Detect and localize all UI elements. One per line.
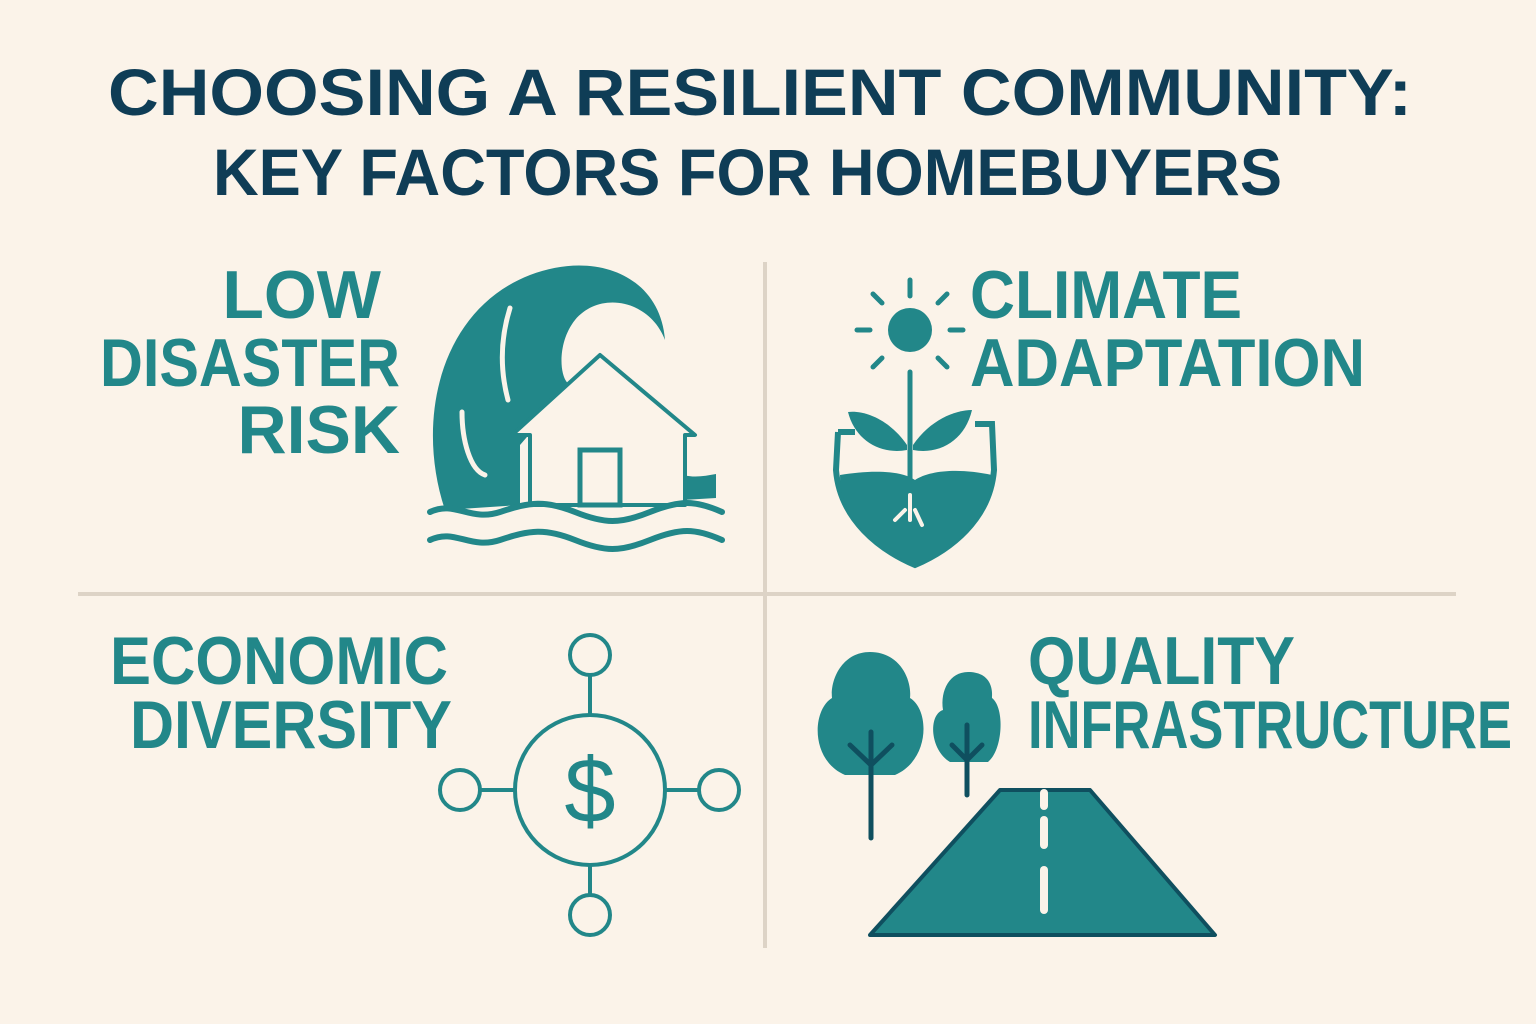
icon: wave and house [430, 265, 722, 549]
heading: economic diversity [110, 623, 452, 763]
panel: economic diversity [110, 623, 739, 935]
panel: low disaster risk [100, 257, 722, 549]
icon: sun and plant shield [836, 280, 994, 565]
heading: climate adaptation: ADAPTATION [970, 325, 1365, 401]
heading: low disaster risk [100, 257, 400, 468]
title: CHOOSING A RESILIENT COMMUNITY: [108, 55, 1412, 129]
icon: trees and road [818, 652, 1215, 935]
heading: climate adaptation [970, 257, 1365, 401]
heading: economic diversity: ECONOMIC [110, 623, 448, 699]
title [108, 55, 1412, 209]
heading: quality infrastructure: QUALITY [1028, 623, 1295, 699]
heading: economic diversity: DIVERSITY [130, 687, 452, 763]
panel: quality infrastructure [818, 623, 1512, 935]
heading: low disaster risk: RISK [238, 392, 400, 468]
heading: climate adaptation: CLIMATE [970, 257, 1242, 333]
panel: climate adaptation [836, 257, 1365, 565]
title: KEY FACTORS FOR HOMEBUYERS [213, 135, 1282, 209]
heading: quality infrastructure [1028, 623, 1512, 763]
icon: dollar network: $ [564, 740, 616, 842]
icon: dollar network [440, 635, 739, 935]
heading: low disaster risk: LOW [222, 257, 382, 333]
heading: low disaster risk: DISASTER [100, 325, 400, 401]
